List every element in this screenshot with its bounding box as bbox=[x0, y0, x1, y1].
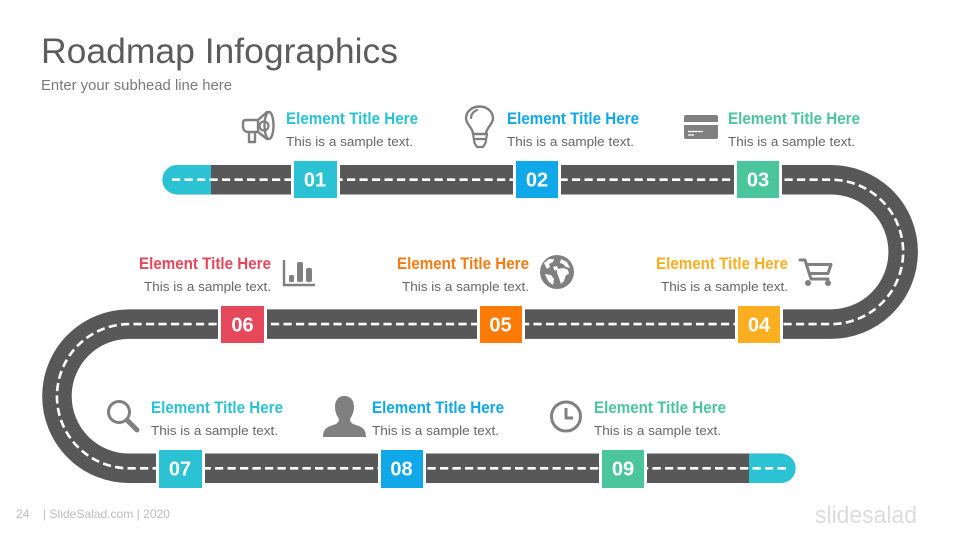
step 08: 08 bbox=[390, 458, 413, 480]
step 02 bbox=[507, 110, 639, 201]
icon: globe bbox=[540, 255, 574, 289]
step 05: Element Title Here bbox=[397, 255, 529, 273]
step 02: Element Title Here bbox=[507, 110, 639, 128]
logo: slidesalad bbox=[815, 502, 917, 529]
step 04 bbox=[656, 255, 788, 346]
footer: | SlideSalad.com | 2020 bbox=[43, 507, 170, 521]
icon: clock bbox=[552, 402, 580, 431]
step 09: This is a sample text. bbox=[594, 423, 721, 438]
step 03 bbox=[728, 110, 860, 201]
step 06: This is a sample text. bbox=[144, 279, 271, 294]
step 08 bbox=[372, 399, 504, 491]
icon: bar chart bbox=[284, 260, 315, 285]
step 07: 07 bbox=[169, 458, 191, 480]
icon: shopping cart bbox=[800, 260, 831, 286]
footer: 24 bbox=[16, 507, 30, 521]
step 05: 05 bbox=[489, 314, 512, 336]
step 09: Element Title Here bbox=[594, 399, 726, 417]
step 04: This is a sample text. bbox=[661, 279, 788, 294]
step 07: Element Title Here bbox=[151, 399, 283, 417]
step 06: Element Title Here bbox=[139, 255, 271, 273]
road centre line bbox=[57, 180, 903, 468]
step 02: 02 bbox=[526, 170, 548, 192]
step 02: This is a sample text. bbox=[507, 134, 634, 149]
step 03: Element Title Here bbox=[728, 110, 860, 128]
title: Roadmap Infographics bbox=[41, 32, 398, 71]
icon: credit card bbox=[684, 115, 718, 139]
step 08: This is a sample text. bbox=[372, 423, 499, 438]
step 05 bbox=[397, 255, 529, 346]
step 01: This is a sample text. bbox=[286, 134, 413, 149]
step 01: 01 bbox=[304, 170, 326, 192]
icon: magnifier bbox=[108, 402, 137, 430]
road end cap bbox=[749, 454, 796, 483]
step 04: Element Title Here bbox=[656, 255, 788, 273]
step 09: 09 bbox=[612, 458, 634, 480]
step 03: 03 bbox=[747, 170, 769, 192]
step 09 bbox=[594, 399, 726, 491]
step 03: This is a sample text. bbox=[728, 134, 855, 149]
road start cap bbox=[162, 165, 211, 194]
step 07 bbox=[151, 399, 283, 491]
step 06: 06 bbox=[231, 314, 254, 336]
step 01: Element Title Here bbox=[286, 110, 418, 128]
icon: light bulb bbox=[466, 106, 493, 147]
road bbox=[57, 165, 903, 483]
icon: megaphone bbox=[243, 112, 274, 142]
step 07: This is a sample text. bbox=[151, 423, 278, 438]
subhead: Enter your subhead line here bbox=[41, 78, 232, 94]
step 01 bbox=[286, 110, 418, 201]
step 05: This is a sample text. bbox=[402, 279, 529, 294]
step 06 bbox=[139, 255, 271, 346]
step 04: 04 bbox=[748, 314, 771, 336]
step 08: Element Title Here bbox=[372, 399, 504, 417]
icon: person bbox=[323, 396, 366, 437]
